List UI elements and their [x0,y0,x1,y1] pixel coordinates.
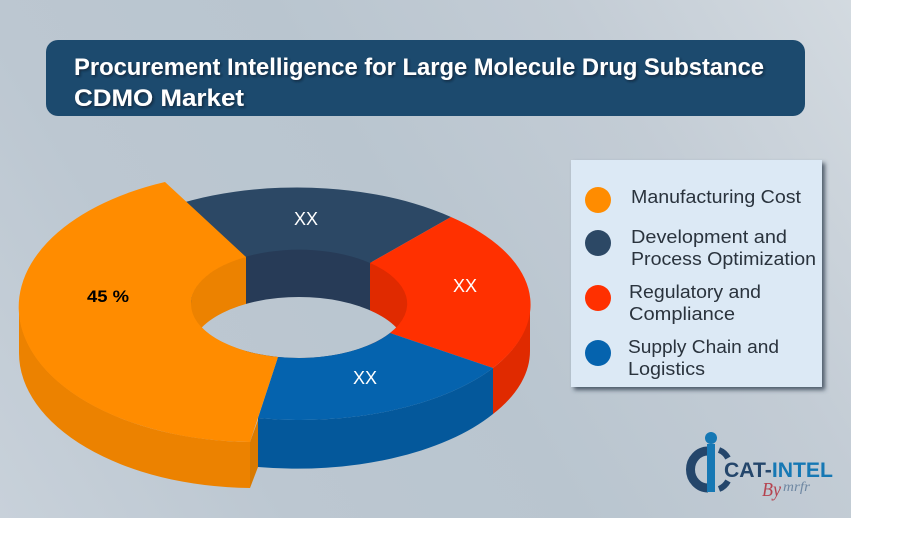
label: blue XX: XX [353,368,377,388]
inner walls of the donut hole [191,250,408,359]
donut chart [19,182,531,488]
legend item: supply chain and logistics: Supply Chain and [628,337,779,357]
legend item: development and process optimization [585,227,816,269]
label: red XX: XX [453,276,477,296]
segment: development and process optimization [120,187,451,304]
title banner: Procurement Intelligence for Large Molecule Drug Substance [74,54,764,81]
title banner: CDMO Market [74,85,244,112]
legend item: supply chain and logistics [585,337,779,379]
segment: supply chain and logistics [258,333,493,420]
legend item: manufacturing cost [585,187,801,213]
segment: regulatory and compliance side wall [493,304,530,414]
legend item: regulatory and compliance: Compliance [629,304,735,324]
legend item: development and process optimization: Development and [631,227,787,247]
logo: CAT-INTEL by mrfr [690,432,833,501]
legend item: manufacturing cost: Manufacturing Cost [631,187,801,207]
icon: logo mark [690,432,728,492]
logo byline: By [762,479,781,501]
label: 45 %: 45 % [87,287,129,306]
title banner [46,40,805,116]
logo wordmark: CAT-INTEL [724,459,833,482]
logo byline: mrfr [783,480,811,495]
legend item: supply chain and logistics: Logistics [628,359,705,379]
donut hole [202,297,396,358]
legend panel [571,160,822,387]
legend item: development and process optimization: Process Optimization [631,249,816,269]
label: navy XX: XX [294,209,318,229]
segment: manufacturing cost [19,182,278,442]
legend item: regulatory and compliance [585,282,761,324]
logo byline [762,479,811,501]
segment: manufacturing cost side wall [19,307,250,488]
segment: supply chain side wall [258,368,493,469]
segment: regulatory and compliance [370,217,531,368]
legend item: regulatory and compliance: Regulatory and [629,282,761,302]
segment: manufacturing cost end cap [250,420,258,488]
